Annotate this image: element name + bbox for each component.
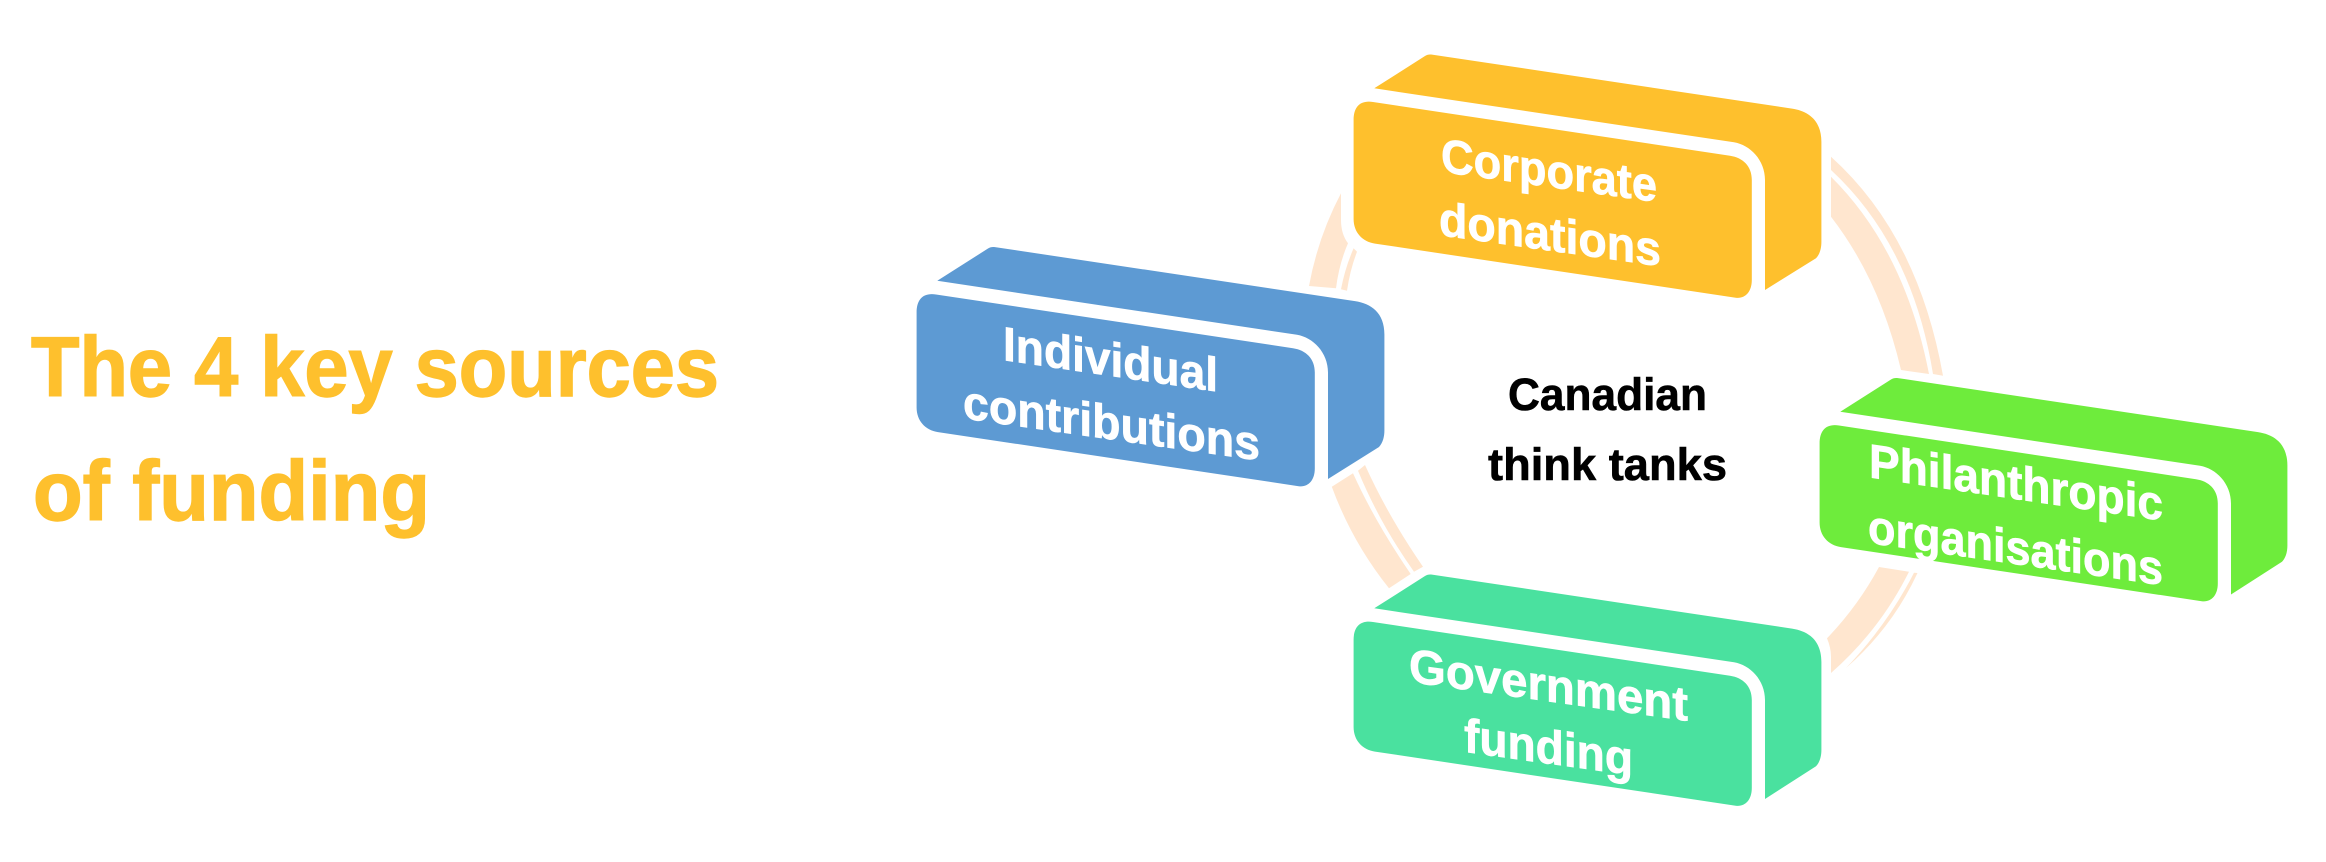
center label: Canadian xyxy=(1508,369,1707,420)
panel: individual contributions: Individual xyxy=(1003,317,1218,403)
panel: government funding xyxy=(1354,574,1821,806)
title: of funding xyxy=(33,444,430,538)
ring connecting the funding sources xyxy=(1309,157,1943,673)
panel: philanthropic organisations: organisations xyxy=(1868,500,2163,596)
panel: corporate donations: donations xyxy=(1439,192,1661,277)
center label xyxy=(1488,369,1727,490)
panel: government funding: funding xyxy=(1464,709,1633,786)
panel: philanthropic organisations xyxy=(1820,378,2287,601)
title xyxy=(31,320,719,538)
panel: individual contributions: contributions xyxy=(963,376,1260,472)
panel: philanthropic organisations: Philanthropic xyxy=(1869,435,2163,532)
panel: corporate donations: Corporate xyxy=(1441,129,1657,213)
panel: corporate donations xyxy=(1354,54,1821,298)
panel: individual contributions xyxy=(917,247,1384,486)
panel: government funding: Government xyxy=(1409,639,1688,732)
center label: think tanks xyxy=(1488,439,1727,490)
title: The 4 key sources xyxy=(31,320,719,414)
